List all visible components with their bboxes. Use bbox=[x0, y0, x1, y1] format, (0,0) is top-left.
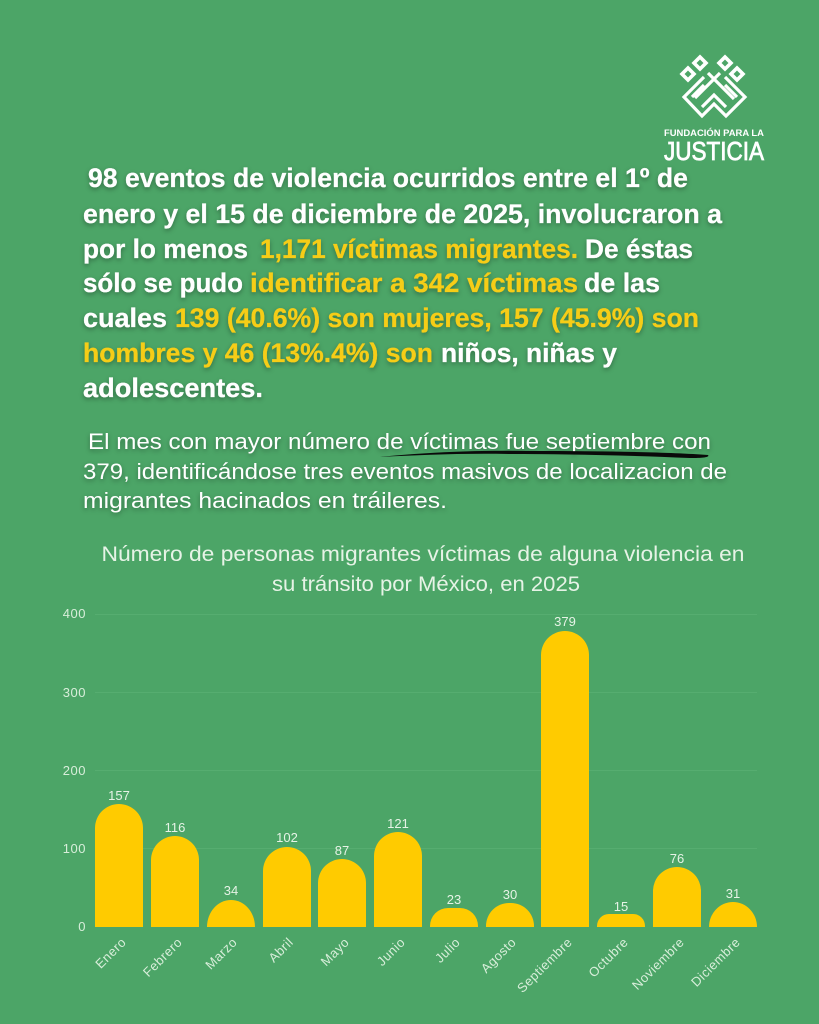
text block: main summary: enero y el 15 de diciembre de 2025, involucraron a bbox=[83, 199, 723, 229]
value labels: 102 bbox=[276, 830, 298, 845]
logo: Fundación para la Justicia bbox=[664, 57, 765, 166]
y axis labels: 400 bbox=[63, 606, 86, 621]
month labels: Agosto bbox=[478, 935, 519, 976]
y axis labels: 200 bbox=[63, 763, 86, 778]
text block: main summary: niños, niñas y bbox=[441, 338, 617, 368]
chart title: su tránsito por México, en 2025 bbox=[272, 573, 580, 596]
chart title bbox=[102, 543, 744, 596]
text block: main summary: por lo menos bbox=[83, 234, 248, 264]
month labels: Noviembre bbox=[629, 935, 687, 993]
value labels: 23 bbox=[447, 892, 461, 907]
logo text: Justicia: JUSTICIA bbox=[664, 136, 765, 166]
value labels: 121 bbox=[387, 816, 409, 831]
month labels: Octubre bbox=[585, 935, 631, 980]
hand-drawn underline bbox=[378, 451, 708, 458]
value labels: 34 bbox=[224, 883, 238, 898]
chart title: Número de personas migrantes víctimas de alguna violencia en bbox=[102, 543, 744, 566]
month labels: Diciembre bbox=[688, 935, 743, 990]
text block: peak month bbox=[83, 429, 727, 513]
text block: peak month: El mes con mayor número de víctimas fue septiembre con bbox=[88, 429, 711, 454]
y axis labels: 100 bbox=[63, 841, 86, 856]
month labels: Enero bbox=[92, 935, 129, 971]
y axis labels: 300 bbox=[63, 685, 86, 700]
month labels: Septiembre bbox=[514, 935, 575, 996]
value labels: 30 bbox=[503, 887, 517, 902]
y axis labels: 0 bbox=[78, 919, 86, 934]
logo text: Fundación para la: FUNDACIÓN PARA LA bbox=[664, 127, 764, 139]
text block: peak month: 379, identificándose tres eventos masivos de localizacion de bbox=[83, 459, 727, 484]
y axis labels bbox=[63, 606, 86, 934]
text block: peak month: migrantes hacinados en tráileres. bbox=[83, 488, 447, 513]
text block: main summary: De éstas bbox=[585, 234, 693, 264]
text block: main summary bbox=[83, 163, 723, 403]
value labels: 76 bbox=[670, 851, 684, 866]
month labels: Julio bbox=[432, 935, 463, 966]
month labels: Junio bbox=[374, 935, 408, 969]
value labels: 157 bbox=[108, 788, 130, 803]
month labels: Febrero bbox=[140, 935, 185, 980]
text block: main summary: identificar a 342 víctimas bbox=[250, 268, 578, 298]
month labels bbox=[92, 935, 743, 996]
text block: main summary: hombres y 46 (13%.4%) son bbox=[83, 338, 433, 368]
text block: main summary: cuales bbox=[83, 303, 167, 333]
text block: main summary: 1,171 víctimas migrantes. bbox=[260, 234, 578, 264]
month labels: Abril bbox=[265, 935, 296, 965]
value labels bbox=[108, 614, 740, 914]
value labels: 116 bbox=[165, 820, 185, 835]
value labels: 31 bbox=[726, 886, 740, 901]
text block: main summary: 139 (40.6%) son mujeres, 157 (45.9%) son bbox=[175, 303, 699, 333]
text block: main summary: sólo se pudo bbox=[83, 268, 243, 298]
text block: main summary: de las bbox=[584, 268, 660, 298]
value labels: 379 bbox=[554, 614, 576, 629]
text block: main summary: 98 eventos de violencia ocurridos entre el 1º de bbox=[88, 163, 688, 193]
text block: main summary: adolescentes. bbox=[83, 373, 263, 403]
value labels: 87 bbox=[335, 843, 349, 858]
month labels: Marzo bbox=[202, 935, 240, 972]
value labels: 15 bbox=[614, 899, 628, 914]
icon: logo emblem bbox=[682, 57, 745, 116]
bar chart: victims per month bbox=[63, 606, 757, 996]
month labels: Mayo bbox=[318, 935, 352, 969]
bars bbox=[95, 631, 757, 927]
